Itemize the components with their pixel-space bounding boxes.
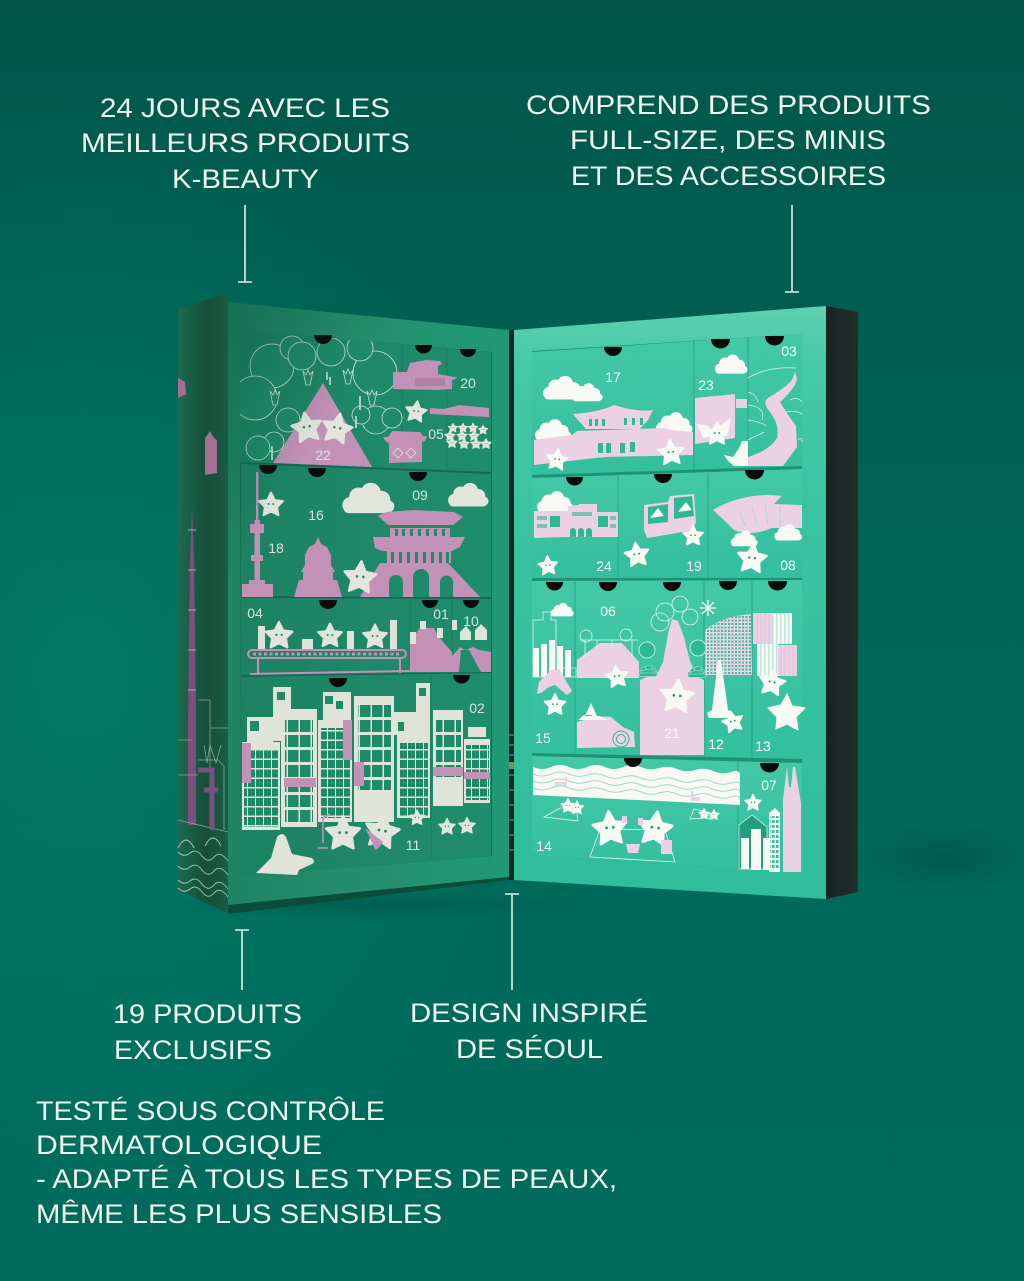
picnic — [544, 807, 712, 862]
annotation: 24 days: 24 JOURS AVEC LES — [100, 93, 390, 123]
palace — [534, 405, 693, 465]
row 1 drawers: 20 — [460, 375, 476, 391]
conveyor belt — [248, 650, 410, 674]
row 4 drawers and street: 11 — [406, 837, 420, 853]
long pink building — [430, 405, 489, 417]
pink mountain — [273, 383, 372, 467]
row 1 drawers: 22 — [315, 447, 331, 463]
clouds — [342, 483, 488, 513]
row 4 drawers and street — [241, 673, 491, 876]
Namdaemun gate — [360, 510, 480, 597]
left notches — [259, 335, 479, 687]
gate — [383, 431, 427, 463]
left panel shade — [228, 302, 420, 620]
row 3 drawers: 15 — [535, 730, 551, 746]
bottom left silhouette star — [256, 834, 314, 875]
annotation: product formats: ET DES ACCESSOIRES — [571, 161, 886, 191]
row 2 drawers: 09 — [412, 487, 428, 503]
row 3 drawers: 01 — [433, 606, 449, 622]
annotation: dermatological testing — [36, 1095, 617, 1229]
right notches — [546, 336, 787, 772]
left panel: open box lid — [178, 293, 509, 914]
row 3 drawers: 13 — [755, 738, 771, 754]
annotation: Seoul design — [410, 998, 648, 1064]
river band — [533, 765, 740, 805]
row 4 drawers and street: 02 — [469, 700, 485, 716]
pink hill with fence — [577, 643, 639, 678]
star — [404, 400, 428, 422]
right front frame — [514, 306, 826, 899]
row 4 drawers — [532, 756, 802, 873]
band stars — [326, 816, 360, 848]
pointer line: bottom centre — [505, 894, 519, 990]
right tray background — [532, 334, 802, 873]
right dark side — [826, 306, 858, 899]
stars — [757, 667, 787, 696]
pointer line: top left — [238, 205, 252, 282]
left skyline — [533, 603, 576, 677]
pink shop street — [410, 620, 491, 672]
row 3 drawers — [532, 580, 805, 759]
annotation: 24 days — [81, 93, 410, 194]
row 4 drawers: 07 — [761, 777, 777, 793]
left tray background — [240, 330, 492, 876]
stacked blocks — [753, 613, 797, 676]
stars — [545, 448, 569, 470]
row 3 drawers: 10 — [463, 613, 479, 629]
left frame bottom edge — [228, 877, 509, 914]
row 2 drawers — [532, 469, 802, 578]
clouds — [543, 355, 748, 401]
row 1 drawers: 23 — [698, 377, 714, 393]
annotation: exclusive products: 19 PRODUITS — [113, 999, 302, 1029]
pink slide — [537, 669, 572, 695]
row 1 drawers — [233, 330, 491, 472]
right skyline — [739, 767, 801, 872]
annotation: Seoul design: DE SÉOUL — [456, 1034, 603, 1064]
pointer line: top right — [785, 205, 799, 292]
row 2 drawers: 24 — [596, 558, 612, 574]
pink tower 21 — [640, 619, 704, 755]
left spine — [178, 293, 228, 913]
hall building — [534, 491, 618, 538]
row 4 drawers: 14 — [536, 838, 552, 854]
annotation: exclusive products: EXCLUSIFS — [114, 1035, 272, 1065]
row 2 drawers: 08 — [780, 557, 796, 573]
row 2 drawers: 16 — [308, 507, 324, 523]
hinge between panels — [508, 330, 516, 880]
annotation: dermatological testing: DERMATOLOGIQUE — [36, 1130, 322, 1160]
pink square — [695, 394, 735, 444]
row 3 drawers: 04 — [247, 605, 263, 621]
products on belt — [258, 620, 397, 649]
annotation: 24 days: MEILLEURS PRODUITS — [81, 128, 410, 158]
mic stand — [318, 814, 330, 848]
row 3 drawers: 21 — [664, 725, 680, 741]
trucks — [644, 494, 696, 538]
row 3 drawers: 12 — [708, 736, 724, 752]
trees outline — [233, 335, 402, 460]
outline trees — [651, 596, 698, 631]
dome stadium — [713, 495, 802, 533]
row 3 drawers — [241, 598, 491, 675]
right panel: open box — [514, 306, 858, 899]
picnic items — [622, 816, 672, 854]
annotation: 24 days: K-BEAUTY — [172, 164, 319, 194]
annotation: dermatological testing: TESTÉ SOUS CONTRÔLE — [36, 1095, 385, 1126]
row 2 drawers — [241, 464, 491, 597]
small stars formation — [445, 423, 491, 448]
row 1 drawers: 17 — [605, 369, 621, 385]
pavilion — [393, 360, 458, 390]
river — [748, 368, 802, 466]
buildings — [242, 683, 490, 830]
annotation: dermatological testing: - ADAPTÉ À TOUS LES TYPES DE PEAUX, — [36, 1164, 617, 1194]
annotation: dermatological testing: MÊME LES PLUS SENSIBLES — [36, 1198, 442, 1229]
row 2 drawers: 19 — [686, 558, 702, 574]
row 1 drawers: 05 — [428, 426, 444, 442]
row 1 drawers: 03 — [781, 343, 797, 359]
N Seoul tower — [242, 472, 273, 597]
car — [577, 703, 635, 748]
row 3 drawers: 06 — [600, 603, 616, 619]
annotation: product formats: FULL-SIZE, DES MINIS — [570, 125, 886, 155]
hotel building with grid — [700, 600, 752, 675]
pointer line: bottom left — [235, 930, 249, 990]
annotation: product formats — [526, 90, 931, 191]
row 2 drawers: 18 — [268, 540, 284, 556]
monument — [294, 537, 342, 597]
annotation: product formats: COMPREND DES PRODUITS — [526, 90, 931, 120]
annotation: exclusive products — [113, 999, 302, 1065]
left front frame — [228, 302, 509, 905]
row 1 drawers — [532, 334, 802, 475]
annotation: Seoul design: DESIGN INSPIRÉ — [410, 998, 648, 1028]
star sunglasses — [290, 410, 355, 444]
traffic cone tower — [707, 660, 733, 718]
shop signs — [242, 720, 490, 787]
side star — [724, 441, 748, 466]
